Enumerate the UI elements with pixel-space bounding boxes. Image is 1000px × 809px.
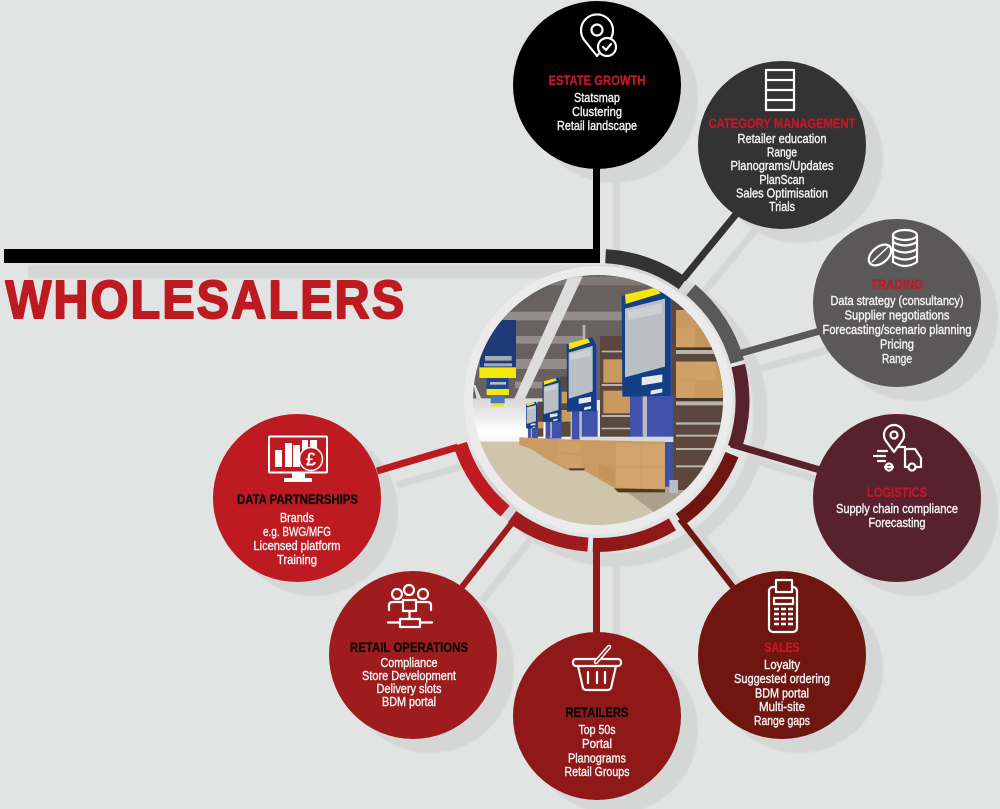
panel: retail operations: BDM portal [382,695,436,709]
panel: retailers [400,202,796,800]
panel: retail operations: Store Development [362,669,456,683]
panel: data partnerships: DATA PARTNERSHIPS [237,491,358,507]
panel: retail operations: RETAIL OPERATIONS [350,639,468,655]
panel: trading: Supplier negotiations [844,308,950,322]
panel: retail operations [329,246,752,739]
panel: sales: Suggested ordering [734,672,830,686]
black header rule [4,249,600,263]
panel: retailers: Portal [582,737,612,751]
panel: retailers: Retail Groups [564,765,630,779]
panel: trading: Forecasting/scenario planning [822,323,972,337]
panel: category management: Range [767,146,797,160]
panel: estate growth: ESTATE GROWTH [548,72,646,88]
panel: category management: Planograms/Updates [730,159,834,173]
panel: sales: BDM portal [755,686,809,700]
panel: sales: SALES [764,639,800,655]
panel: retail operations: Compliance [380,656,438,670]
icon: shopping basket [573,647,621,690]
title: WHOLESALERS: WHOLESALERS [6,269,406,330]
panel: estate growth [513,1,681,260]
icon: team network [388,585,432,627]
panel: trading: Data strategy (consultancy) [830,294,964,308]
icon: coins [865,230,917,269]
panel: sales: Multi-site [759,700,805,714]
panel: data partnerships: e.g. BWG/MFG [263,525,331,539]
central warehouse illustration [460,260,740,534]
panel: data partnerships [213,197,802,604]
panel: category management: Trials [769,200,795,214]
panel: retailers: Planograms [568,752,626,766]
panel: logistics: LOGISTICS [867,484,927,500]
panel: retailers: RETAILERS [566,704,628,720]
panel: sales [410,212,866,739]
panel: category management: Sales Optimisation [736,186,828,200]
panel: data partnerships: Training [277,553,317,567]
icon: location pin with check [581,14,616,56]
panel: category management: CATEGORY MANAGEMENT [708,115,856,131]
panel: logistics: Supply chain compliance [836,502,958,516]
panel: estate growth: Statsmap [574,91,620,105]
panel: trading: TRADING [871,276,923,292]
panel: trading [394,197,981,604]
panel: retailers: Top 50s [578,723,616,737]
panel: category management: Retailer education [738,132,827,146]
icon: delivery truck with pin [874,425,921,470]
panel: sales: Range gaps [754,714,810,728]
panel: trading: Range [882,352,912,366]
panel: data partnerships: Licensed platform [254,539,340,553]
panel: category management [446,61,866,552]
panel: logistics [423,225,981,582]
panel: logistics: Forecasting [868,516,926,530]
icon: shelving [766,70,794,110]
panel: retail operations: Delivery slots [376,682,442,696]
panel: sales: Loyalty [764,658,801,672]
panel: trading: Pricing [880,338,914,352]
panel: data partnerships: Brands [280,511,314,525]
icon: card terminal [769,580,797,632]
icon: monitor with chart and pound: £ [306,450,316,470]
panel: category management: PlanScan [760,173,805,187]
panel: estate growth: Clustering [572,105,622,119]
panel: estate growth: Retail landscape [557,119,637,133]
icon: monitor with chart and pound [269,436,327,482]
